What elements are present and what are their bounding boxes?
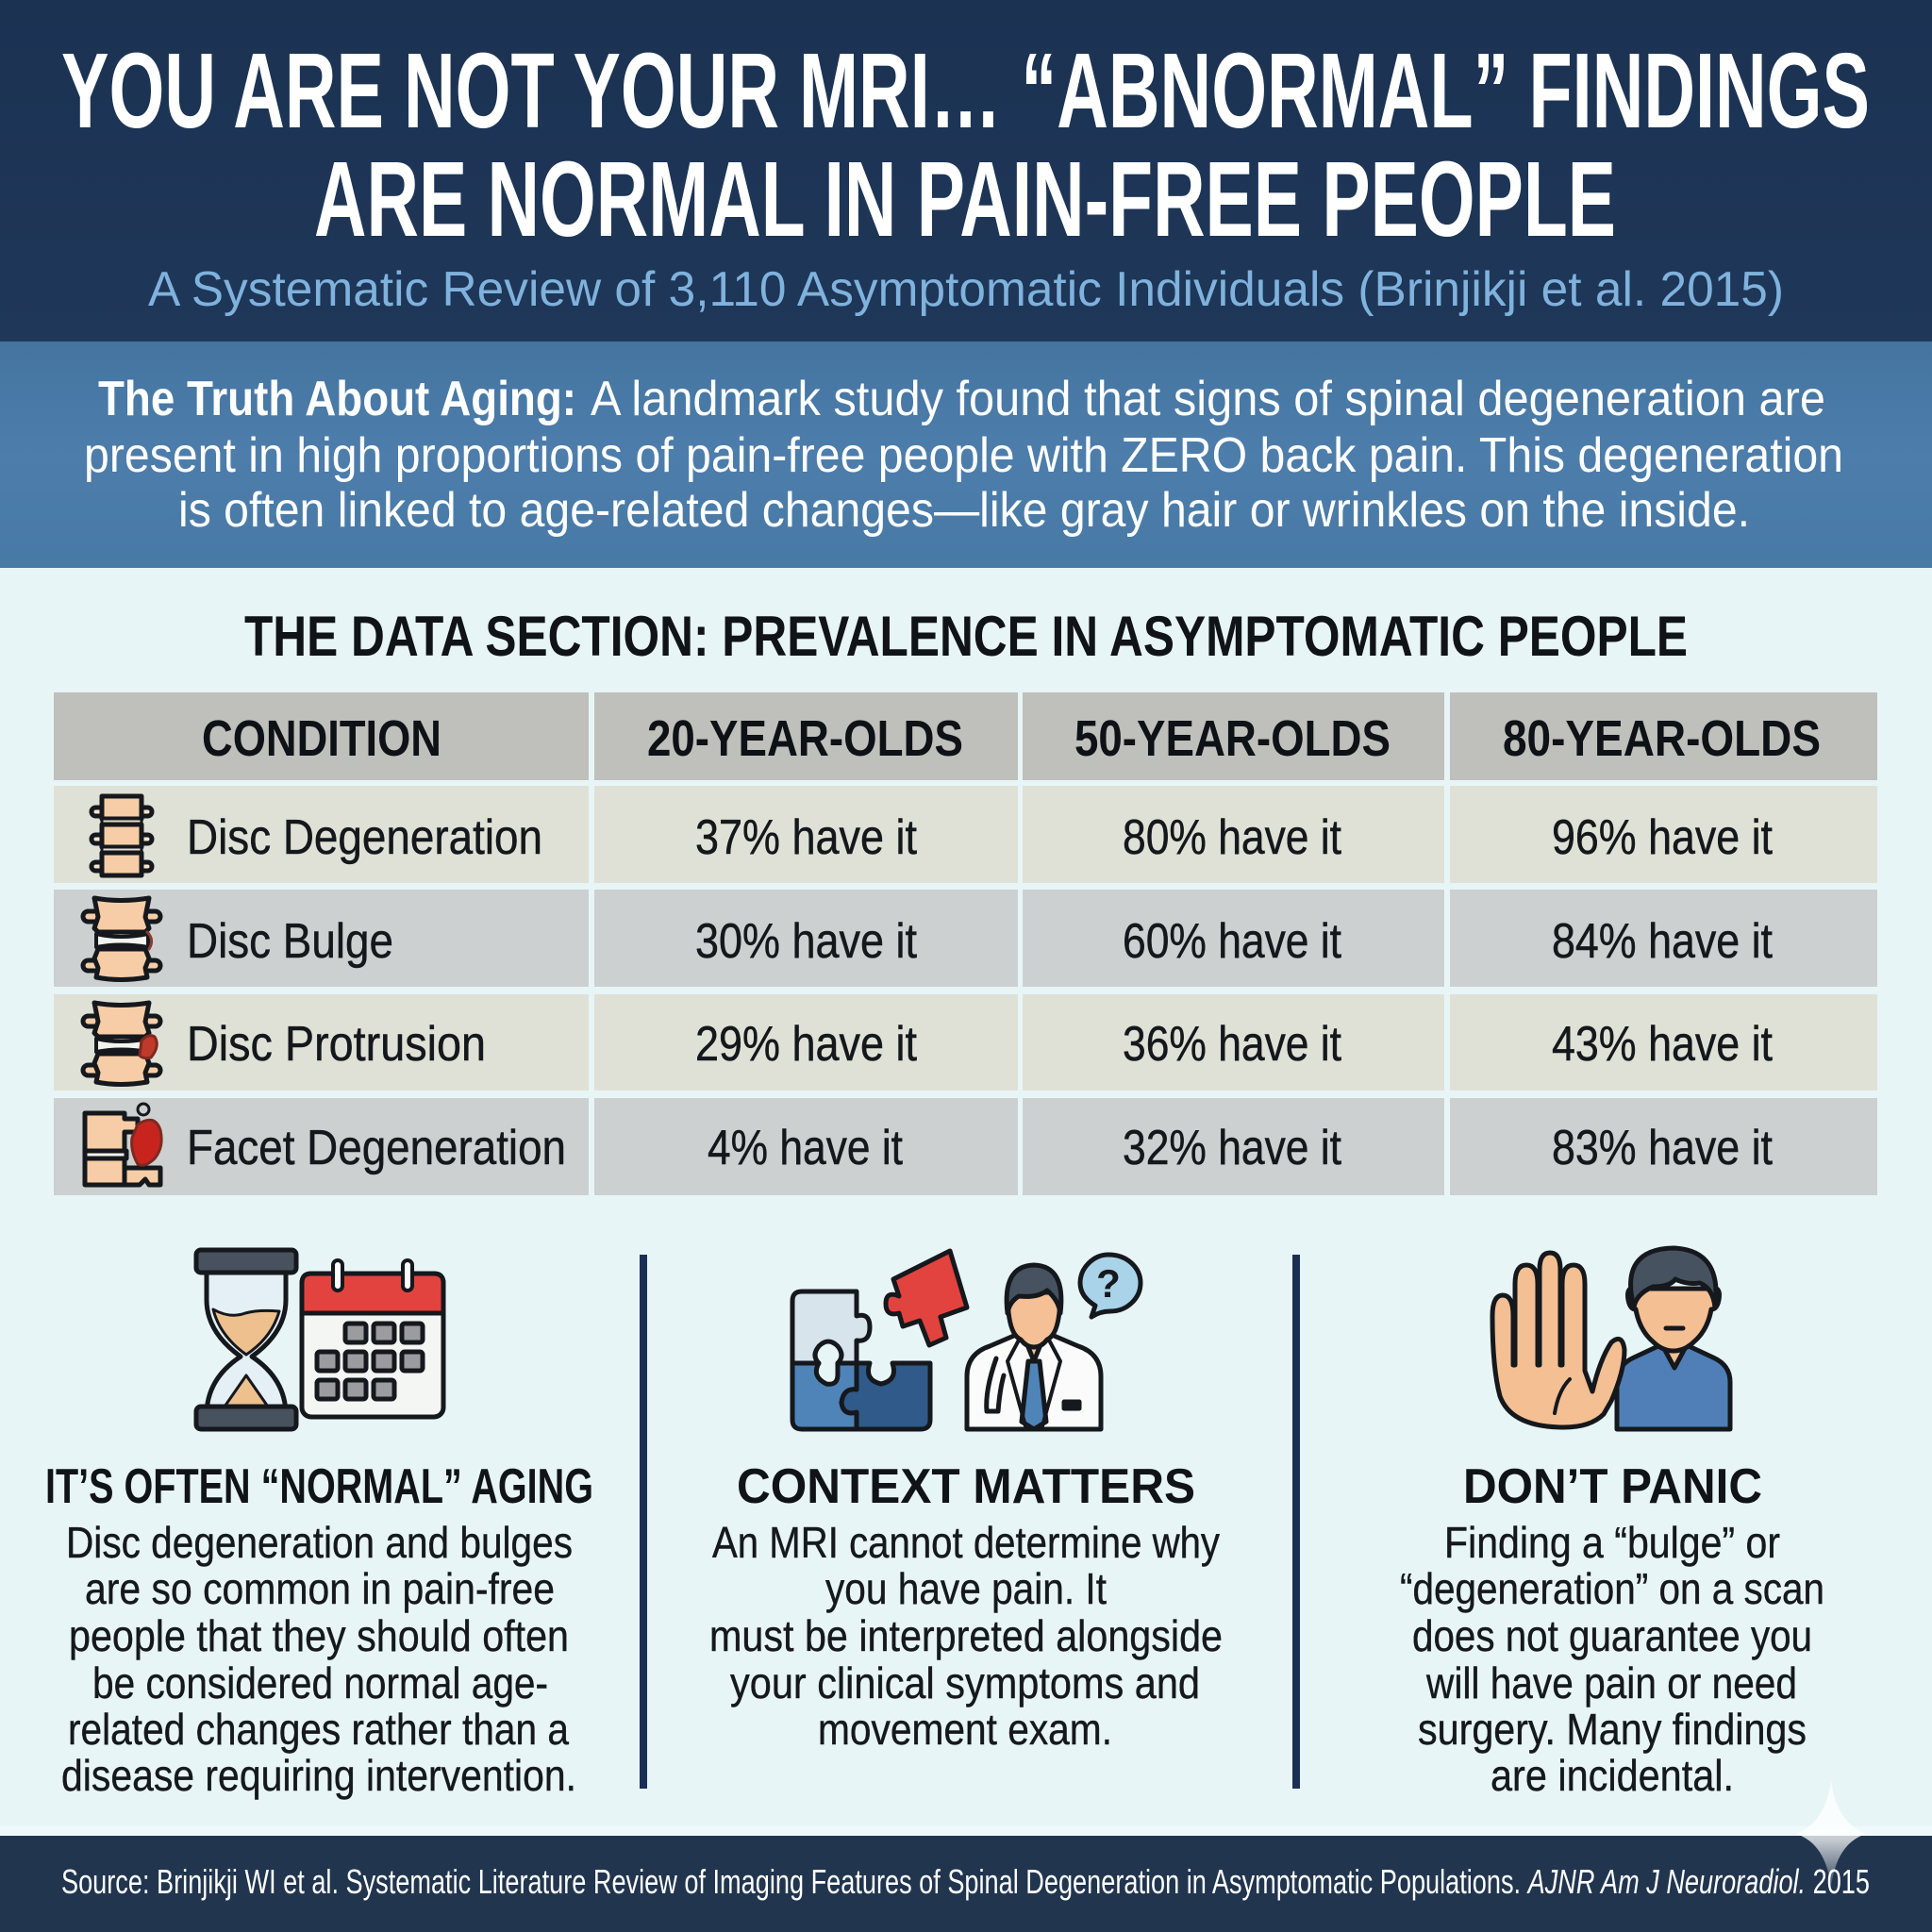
icon: puzzle xyxy=(792,1291,930,1429)
panel: header xyxy=(0,0,1932,341)
panel: footer xyxy=(0,1781,1932,1932)
row: disc degeneration: 80% have it xyxy=(1123,810,1341,865)
body: normal aging: disease requiring intervention. xyxy=(61,1751,576,1800)
watermark star xyxy=(1796,1781,1866,1887)
row: facet degeneration xyxy=(54,1098,1877,1195)
body: normal aging xyxy=(61,1518,576,1800)
table header row: CONDITION xyxy=(202,710,441,767)
row: disc bulge xyxy=(54,890,1877,987)
body: normal aging: Disc degeneration and bulges xyxy=(66,1518,573,1567)
table header row xyxy=(54,692,1877,780)
body: don't panic: Finding a “bulge” or xyxy=(1444,1518,1780,1567)
intro line 1 xyxy=(98,372,1825,426)
icon: person xyxy=(1617,1248,1730,1429)
icon: doctor xyxy=(967,1265,1101,1429)
icon: hourglass xyxy=(196,1250,296,1429)
icon: calendar xyxy=(302,1260,443,1417)
heading: context matters: CONTEXT MATTERS xyxy=(737,1459,1195,1514)
row: facet degeneration: 32% have it xyxy=(1123,1121,1341,1175)
panel: context matters xyxy=(709,1251,1223,1754)
row: disc bulge: Disc Bulge xyxy=(187,914,393,969)
row: disc degeneration: 37% have it xyxy=(695,810,917,865)
body: don't panic: “degeneration” on a scan xyxy=(1400,1564,1824,1613)
icon: question bubble: ? xyxy=(1096,1261,1121,1306)
icon: healthy spine xyxy=(92,796,152,875)
body: context matters: An MRI cannot determine why xyxy=(712,1518,1220,1567)
body: don't panic: does not guarantee you xyxy=(1412,1611,1812,1660)
row: facet degeneration: 4% have it xyxy=(708,1121,903,1175)
row: disc protrusion: 29% have it xyxy=(695,1017,917,1072)
icon: question bubble xyxy=(1080,1255,1141,1317)
table header row: 50-YEAR-OLDS xyxy=(1074,710,1391,767)
divider left xyxy=(640,1255,647,1789)
icon: facet degeneration xyxy=(85,1104,161,1185)
panel: don't panic xyxy=(1400,1248,1824,1800)
panel: intro band xyxy=(0,341,1932,568)
row: disc protrusion xyxy=(54,994,1877,1091)
row: disc bulge: 60% have it xyxy=(1123,914,1341,969)
body: don't panic: surgery. Many findings xyxy=(1418,1705,1807,1754)
icon: disc bulge xyxy=(83,898,160,979)
body: don't panic: are incidental. xyxy=(1491,1751,1734,1800)
body: context matters xyxy=(709,1518,1223,1754)
body: context matters: must be interpreted alongside xyxy=(709,1611,1223,1660)
icon: red puzzle piece xyxy=(886,1251,967,1345)
row: disc bulge: 30% have it xyxy=(695,914,917,969)
divider right xyxy=(1292,1255,1300,1789)
table xyxy=(54,692,1877,1195)
body: normal aging: related changes rather than a xyxy=(68,1705,569,1754)
intro line 1: A landmark study found that signs of spinal degeneration are xyxy=(591,372,1825,426)
icon: disc protrusion xyxy=(83,1003,160,1085)
row: disc degeneration: Disc Degeneration xyxy=(187,810,542,865)
body: don't panic: will have pain or need xyxy=(1425,1658,1797,1707)
panel: normal aging xyxy=(45,1250,593,1800)
heading: don't panic: DON’T PANIC xyxy=(1463,1459,1762,1514)
table header row: 80-YEAR-OLDS xyxy=(1503,710,1821,767)
table header row: 20-YEAR-OLDS xyxy=(647,710,963,767)
body: normal aging: are so common in pain-free xyxy=(85,1564,555,1613)
subtitle: A Systematic Review of 3,110 Asymptomatic Individuals (Brinjikji et al. 2015) xyxy=(148,262,1784,317)
icon: stop hand xyxy=(1492,1253,1624,1427)
row: disc protrusion: Disc Protrusion xyxy=(187,1017,486,1072)
row: disc degeneration xyxy=(54,786,1877,883)
body: context matters: your clinical symptoms and xyxy=(730,1658,1200,1707)
body: don't panic xyxy=(1400,1518,1824,1800)
row: disc protrusion: 36% have it xyxy=(1123,1017,1341,1072)
body: normal aging: be considered normal age- xyxy=(92,1658,548,1707)
body: context matters: movement exam. xyxy=(818,1705,1112,1754)
intro line 3: is often linked to age-related changes—like gray hair or wrinkles on the inside. xyxy=(178,483,1750,538)
row: disc bulge: 84% have it xyxy=(1552,914,1773,969)
row: facet degeneration: Facet Degeneration xyxy=(187,1121,566,1175)
body: context matters: you have pain. It xyxy=(825,1564,1107,1613)
row: disc degeneration: 96% have it xyxy=(1552,810,1773,865)
heading: normal aging: IT’S OFTEN “NORMAL” AGING xyxy=(45,1459,593,1514)
row: disc protrusion: 43% have it xyxy=(1552,1017,1773,1072)
intro line 1: The Truth About Aging: xyxy=(98,372,576,426)
row: facet degeneration: 83% have it xyxy=(1552,1121,1773,1175)
intro line 2: present in high proportions of pain-free people with ZERO back pain. This degeneration xyxy=(84,428,1843,483)
body: normal aging: people that they should often xyxy=(69,1611,569,1660)
